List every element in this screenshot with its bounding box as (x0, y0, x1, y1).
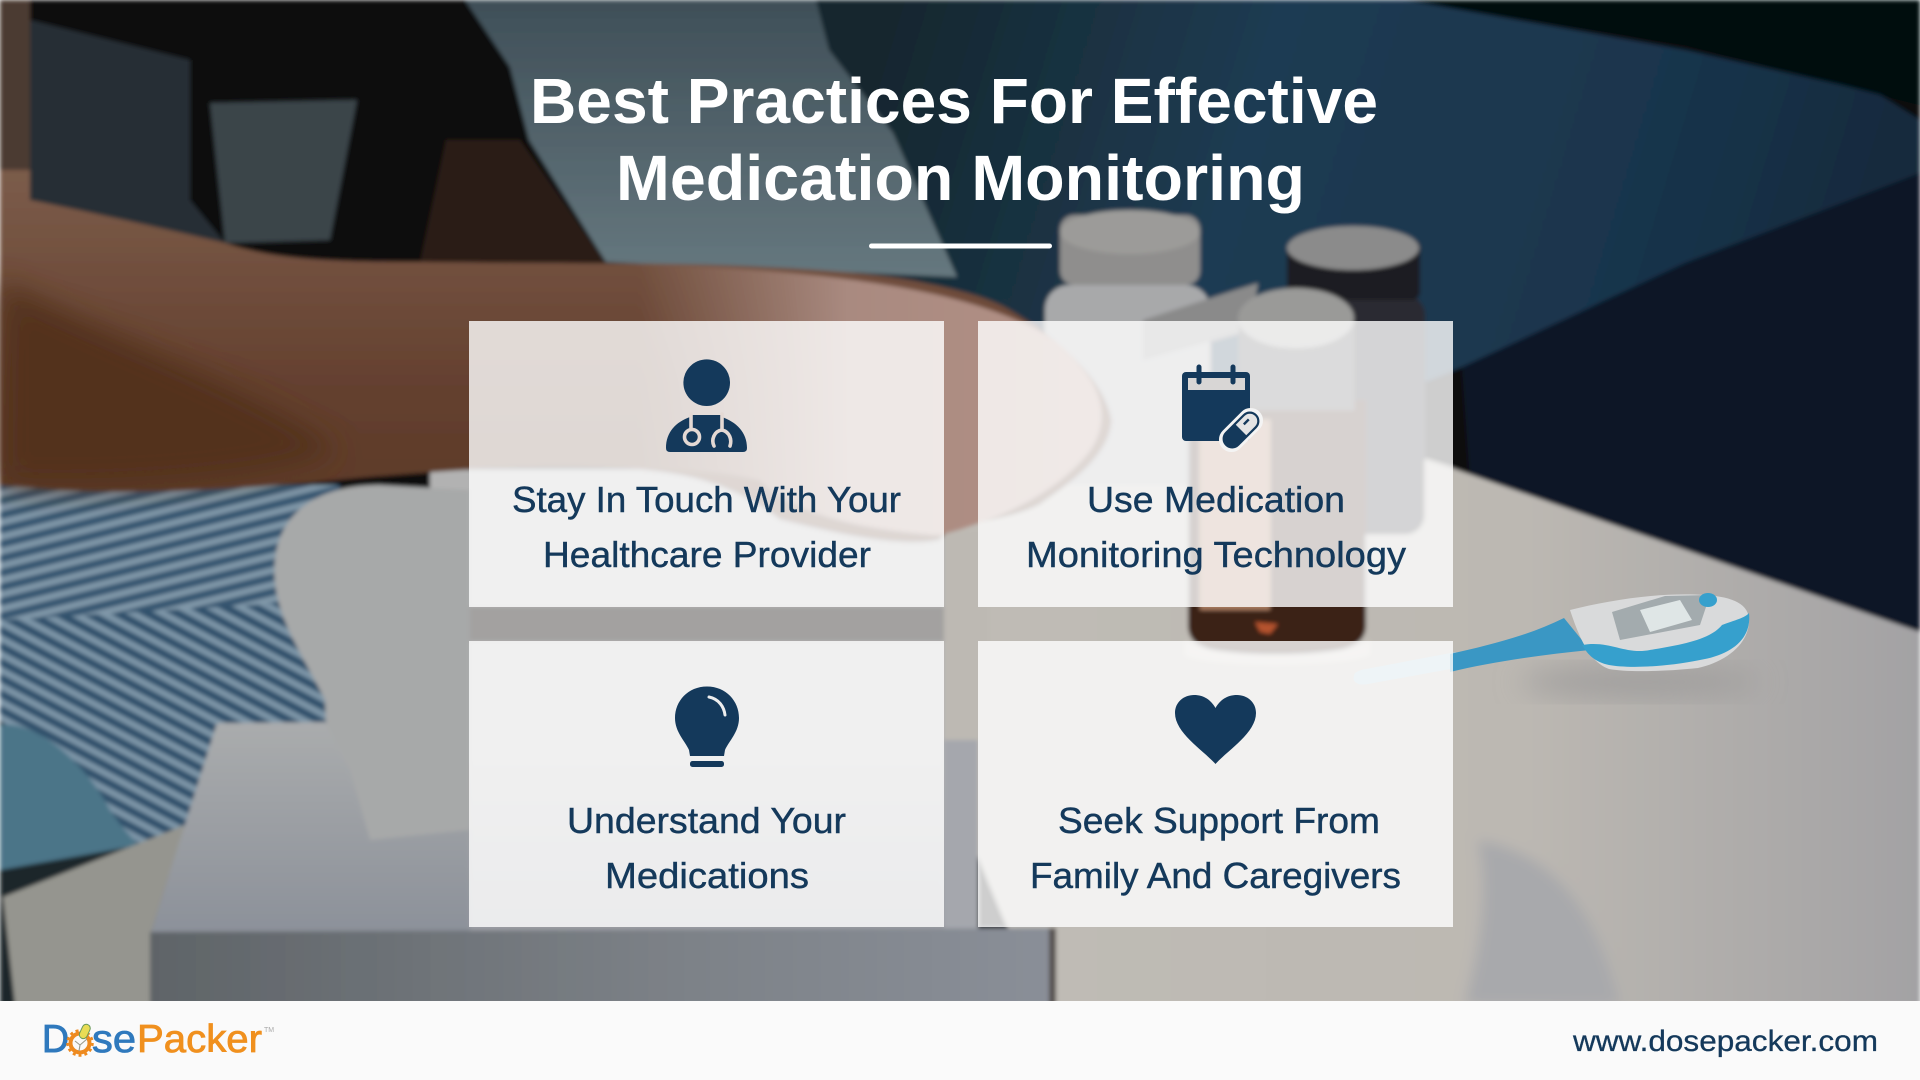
text: monitoring technology: Monitoring Technology (1026, 534, 1406, 575)
sleeve (465, 0, 957, 277)
crumpled tissue on table (1465, 840, 1620, 1005)
title (530, 65, 1378, 214)
text: stay in touch: Stay In Touch With Your (512, 479, 901, 520)
icon: light bulb (675, 686, 739, 767)
text: monitoring technology (1026, 479, 1406, 575)
shirt panels (30, 20, 225, 243)
front amber bottle (1188, 400, 1366, 655)
title: Best Practices For Effective (530, 65, 1378, 137)
icon: calendar with pill (1182, 367, 1268, 457)
panel: stay in touch (469, 321, 944, 607)
dark corner (0, 845, 150, 1005)
logo: DosePacker (42, 1018, 274, 1061)
tissue (274, 485, 470, 840)
panel: understand medications (469, 641, 944, 927)
text: seek support (1030, 800, 1401, 896)
logo: DosePacker: D (42, 1018, 69, 1061)
text: understand medications (567, 800, 846, 896)
title underline (869, 244, 1052, 248)
text: seek support: Seek Support From (1058, 800, 1380, 841)
text: understand medications: Understand Your (567, 800, 846, 841)
logo: DosePacker: TM (264, 1027, 274, 1034)
couch (700, 0, 1920, 430)
logo: DosePacker: se (92, 1018, 136, 1061)
text: monitoring technology: Use Medication (1087, 479, 1345, 520)
text: seek support: Family And Caregivers (1030, 855, 1401, 896)
logo: DosePacker: Packer (137, 1018, 262, 1061)
back bottles (1045, 285, 1210, 485)
panel: monitoring technology (978, 321, 1453, 607)
icon: heart (1175, 695, 1256, 764)
thermometer (1354, 593, 1760, 696)
footer bar (0, 1001, 1920, 1080)
box top (150, 722, 470, 940)
box front (150, 928, 1055, 1005)
icon: doctor with stethoscope (666, 359, 747, 452)
text: stay in touch: Healthcare Provider (543, 534, 871, 575)
title: Medication Monitoring (616, 142, 1305, 214)
text: stay in touch (512, 479, 901, 575)
table (930, 420, 1920, 1005)
under-arm light fill (430, 470, 960, 940)
striped blanket (0, 485, 340, 635)
box side (3, 825, 185, 1005)
shadowed skin edge (0, 0, 30, 170)
text: understand medications: Medications (605, 855, 809, 896)
arm and hand (0, 0, 1112, 543)
panel: seek support (978, 641, 1453, 927)
teal cloth (0, 725, 147, 880)
website url: www.dosepacker.com (1572, 1025, 1878, 1058)
